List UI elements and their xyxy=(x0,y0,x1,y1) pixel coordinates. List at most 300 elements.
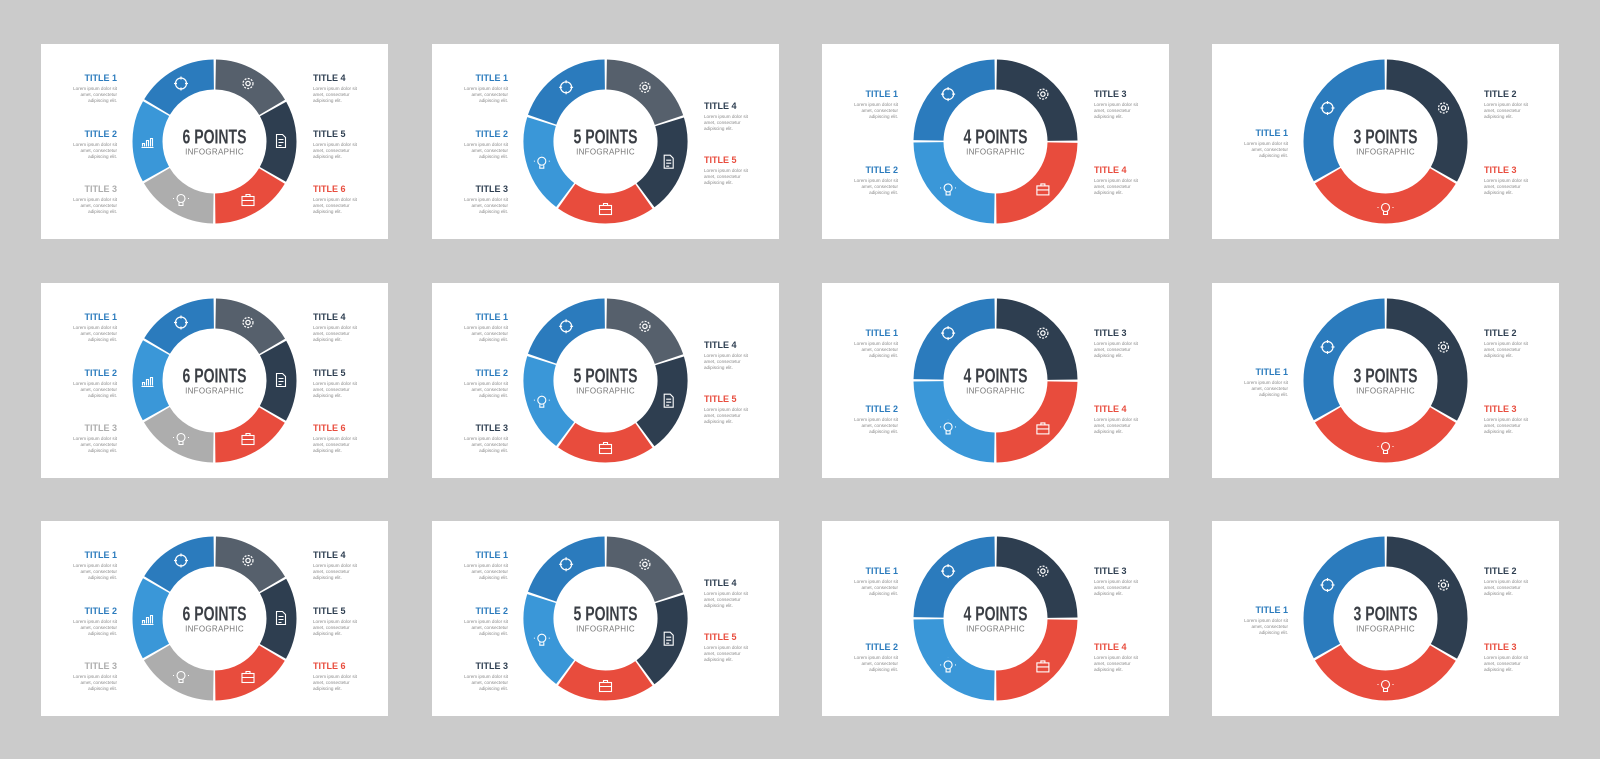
text: title 4 xyxy=(313,312,358,342)
text: title 4 xyxy=(1094,165,1139,195)
text: title 1: TITLE 1 xyxy=(475,550,508,560)
ring: 5 segments: INFOGRAPHIC xyxy=(576,624,635,634)
ring: 4 segments: 4 POINTS xyxy=(964,604,1028,626)
text: title 4 xyxy=(704,578,749,608)
text: title 5 xyxy=(313,129,358,159)
text: title 2: Lorem ipsum dolor sit xyxy=(73,619,118,624)
text: title 5 xyxy=(704,632,749,662)
text: title 2: Lorem ipsum dolor sit xyxy=(854,417,899,422)
text: title 6: Lorem ipsum dolor sit xyxy=(313,197,358,202)
text: title 4: Lorem ipsum dolor sit xyxy=(313,325,358,330)
text: title 3: adipiscing elit. xyxy=(1094,353,1123,358)
text: title 2: adipiscing elit. xyxy=(479,393,508,398)
text: title 2: adipiscing elit. xyxy=(88,154,117,159)
text: title 3: Lorem ipsum dolor sit xyxy=(73,197,118,202)
text: title 2: Lorem ipsum dolor sit xyxy=(1484,102,1529,107)
ring: 5 segments xyxy=(512,48,699,235)
text: title 6: Lorem ipsum dolor sit xyxy=(313,674,358,679)
text: title 3 xyxy=(1484,404,1529,434)
text: title 1: Lorem ipsum dolor sit xyxy=(73,325,118,330)
text: title 4: TITLE 4 xyxy=(704,578,737,588)
text: title 1: Lorem ipsum dolor sit xyxy=(1244,141,1289,146)
text: title 3 xyxy=(1094,566,1139,596)
text: title 3: amet, consectetur xyxy=(80,203,117,208)
text: title 1: TITLE 1 xyxy=(84,312,117,322)
text: title 2: Lorem ipsum dolor sit xyxy=(464,142,509,147)
text: title 4: amet, consectetur xyxy=(704,597,741,602)
text: title 5: TITLE 5 xyxy=(704,632,737,642)
ring: 6 segments xyxy=(123,289,306,472)
text: title 4: amet, consectetur xyxy=(704,120,741,125)
text: title 2: Lorem ipsum dolor sit xyxy=(1484,341,1529,346)
text: title 2: adipiscing elit. xyxy=(88,631,117,636)
text: title 4 xyxy=(704,101,749,131)
card: 5 points arrows xyxy=(432,521,779,716)
text: title 3: amet, consectetur xyxy=(471,203,508,208)
ring: 3 segments: INFOGRAPHIC xyxy=(1356,148,1415,156)
text: title 5: Lorem ipsum dolor sit xyxy=(313,142,358,147)
text: title 3 xyxy=(1094,328,1139,358)
text: title 4: Lorem ipsum dolor sit xyxy=(313,86,358,91)
text: title 2: amet, consectetur xyxy=(1484,108,1521,113)
text: title 1: amet, consectetur xyxy=(471,569,508,574)
text: title 1: amet, consectetur xyxy=(80,92,117,97)
ring: 3 segments: 3 POINTS xyxy=(1354,366,1418,388)
ring: 5 segments xyxy=(512,525,699,712)
text: title 6 xyxy=(313,423,358,453)
text: title 1: amet, consectetur xyxy=(471,92,508,97)
text: title 1: TITLE 1 xyxy=(865,328,898,338)
text: title 1: Lorem ipsum dolor sit xyxy=(464,86,509,91)
text: title 4: adipiscing elit. xyxy=(313,337,342,342)
text: title 1 xyxy=(854,89,899,119)
card: 3 points arrows xyxy=(1212,521,1559,716)
text: title 3: TITLE 3 xyxy=(475,423,508,433)
ring: 6 segments: 6 POINTS xyxy=(182,604,246,626)
text: title 2: amet, consectetur xyxy=(80,387,117,392)
ring: 3 segments xyxy=(1294,289,1477,472)
text: title 1 xyxy=(1244,605,1289,635)
text: title 3: adipiscing elit. xyxy=(479,448,508,453)
text: title 1: adipiscing elit. xyxy=(88,575,117,580)
text: title 6: adipiscing elit. xyxy=(313,448,342,453)
text: title 1: Lorem ipsum dolor sit xyxy=(1244,380,1289,385)
text: title 3: adipiscing elit. xyxy=(88,209,117,214)
text: title 1: TITLE 1 xyxy=(1255,128,1288,138)
text: title 4: Lorem ipsum dolor sit xyxy=(313,563,358,568)
ring: 5 segments: 5 POINTS xyxy=(574,604,638,626)
text: title 5: TITLE 5 xyxy=(704,394,737,404)
text: title 2: adipiscing elit. xyxy=(88,393,117,398)
text: title 1: TITLE 1 xyxy=(84,550,117,560)
text: title 3: adipiscing elit. xyxy=(479,209,508,214)
ring: 6 segments: INFOGRAPHIC xyxy=(185,386,244,396)
ring: 4 segments xyxy=(927,312,1064,449)
text: title 5: adipiscing elit. xyxy=(313,154,342,159)
text: title 1: Lorem ipsum dolor sit xyxy=(854,579,899,584)
text: title 2 xyxy=(464,606,509,636)
text: title 1: Lorem ipsum dolor sit xyxy=(464,563,509,568)
text: title 1: TITLE 1 xyxy=(84,73,117,83)
text: title 5: amet, consectetur xyxy=(704,651,741,656)
text: title 4: TITLE 4 xyxy=(313,312,346,322)
ring: 4 segments: 4 POINTS xyxy=(964,126,1028,148)
text: title 3: TITLE 3 xyxy=(475,184,508,194)
text: title 3: Lorem ipsum dolor sit xyxy=(1094,579,1139,584)
text: title 5 xyxy=(313,368,358,398)
card: 5 points slanted xyxy=(432,283,779,478)
text: title 1: Lorem ipsum dolor sit xyxy=(73,86,118,91)
text: title 3: TITLE 3 xyxy=(84,184,117,194)
text: title 1: amet, consectetur xyxy=(80,331,117,336)
text: title 2 xyxy=(73,129,118,159)
text: title 4: TITLE 4 xyxy=(1094,165,1127,175)
text: title 6: TITLE 6 xyxy=(313,661,346,671)
text: title 3: Lorem ipsum dolor sit xyxy=(1094,102,1139,107)
text: title 1 xyxy=(1244,128,1289,158)
text: title 4: amet, consectetur xyxy=(1094,423,1131,428)
text: title 3: adipiscing elit. xyxy=(88,686,117,691)
text: title 6: amet, consectetur xyxy=(313,442,350,447)
text: title 3: amet, consectetur xyxy=(1484,661,1521,666)
text: title 1 xyxy=(73,312,118,342)
text: title 3: Lorem ipsum dolor sit xyxy=(1484,655,1529,660)
text: title 1: TITLE 1 xyxy=(1255,605,1288,615)
text: title 2: adipiscing elit. xyxy=(869,667,898,672)
text: title 5: amet, consectetur xyxy=(313,387,350,392)
card: 3 points slanted xyxy=(1212,283,1559,478)
text: title 6: TITLE 6 xyxy=(313,184,346,194)
text: title 2: TITLE 2 xyxy=(1484,566,1517,576)
ring: 5 segments: 5 POINTS xyxy=(574,126,638,148)
text: title 6: amet, consectetur xyxy=(313,680,350,685)
text: title 5: TITLE 5 xyxy=(313,129,346,139)
ring: 5 segments: INFOGRAPHIC xyxy=(576,148,635,156)
text: title 6 xyxy=(313,184,358,214)
text: title 2: TITLE 2 xyxy=(84,368,117,378)
text: title 4: TITLE 4 xyxy=(704,340,737,350)
text: title 4: adipiscing elit. xyxy=(313,575,342,580)
text: title 2: TITLE 2 xyxy=(475,606,508,616)
ring: 4 segments xyxy=(927,73,1064,210)
text: title 6: TITLE 6 xyxy=(313,423,346,433)
card: 3 points puzzle xyxy=(1212,44,1559,239)
text: title 5: Lorem ipsum dolor sit xyxy=(313,619,358,624)
text: title 3: Lorem ipsum dolor sit xyxy=(1484,417,1529,422)
text: title 3: adipiscing elit. xyxy=(1094,591,1123,596)
ring: 6 segments xyxy=(123,50,306,233)
text: title 3 xyxy=(1094,89,1139,119)
text: title 2: amet, consectetur xyxy=(80,625,117,630)
text: title 2: adipiscing elit. xyxy=(1484,353,1513,358)
text: title 1: adipiscing elit. xyxy=(479,98,508,103)
text: title 1 xyxy=(73,73,118,103)
text: title 4: TITLE 4 xyxy=(1094,404,1127,414)
card: 6 points arrows xyxy=(41,521,388,716)
text: title 3: amet, consectetur xyxy=(80,442,117,447)
text: title 3: Lorem ipsum dolor sit xyxy=(1484,178,1529,183)
ring: 4 segments: INFOGRAPHIC xyxy=(966,148,1025,156)
text: title 4 xyxy=(313,73,358,103)
text: title 1: adipiscing elit. xyxy=(1259,392,1288,397)
text: title 4 xyxy=(704,340,749,370)
text: title 2: Lorem ipsum dolor sit xyxy=(73,142,118,147)
text: title 2: TITLE 2 xyxy=(475,129,508,139)
text: title 1: adipiscing elit. xyxy=(88,337,117,342)
text: title 2: TITLE 2 xyxy=(475,368,508,378)
text: title 5: amet, consectetur xyxy=(704,174,741,179)
text: title 2: TITLE 2 xyxy=(865,404,898,414)
text: title 3 xyxy=(464,661,509,691)
text: title 3: adipiscing elit. xyxy=(88,448,117,453)
text: title 2: Lorem ipsum dolor sit xyxy=(1484,579,1529,584)
text: title 2 xyxy=(73,606,118,636)
text: title 1: Lorem ipsum dolor sit xyxy=(1244,618,1289,623)
text: title 2: amet, consectetur xyxy=(1484,585,1521,590)
text: title 1: amet, consectetur xyxy=(1251,147,1288,152)
text: title 1: TITLE 1 xyxy=(475,312,508,322)
ring: 3 segments xyxy=(1294,527,1477,710)
text: title 3: amet, consectetur xyxy=(471,680,508,685)
text: title 1: TITLE 1 xyxy=(475,73,508,83)
text: title 2: adipiscing elit. xyxy=(869,429,898,434)
text: title 4: Lorem ipsum dolor sit xyxy=(704,114,749,119)
text: title 1: TITLE 1 xyxy=(865,566,898,576)
text: title 3: amet, consectetur xyxy=(1094,108,1131,113)
text: title 3: Lorem ipsum dolor sit xyxy=(73,674,118,679)
text: title 3: TITLE 3 xyxy=(1094,328,1127,338)
text: title 2 xyxy=(464,368,509,398)
ring: 6 segments: 6 POINTS xyxy=(182,126,246,148)
text: title 3: TITLE 3 xyxy=(475,661,508,671)
text: title 2: adipiscing elit. xyxy=(479,154,508,159)
text: title 1: adipiscing elit. xyxy=(1259,630,1288,635)
ring: 6 segments: 6 POINTS xyxy=(182,366,246,388)
ring: 4 segments xyxy=(927,550,1064,687)
text: title 3: Lorem ipsum dolor sit xyxy=(1094,341,1139,346)
text: title 4: TITLE 4 xyxy=(704,101,737,111)
text: title 2: TITLE 2 xyxy=(1484,328,1517,338)
text: title 5 xyxy=(313,606,358,636)
text: title 1: adipiscing elit. xyxy=(88,98,117,103)
text: title 2: adipiscing elit. xyxy=(1484,114,1513,119)
text: title 3: amet, consectetur xyxy=(1094,347,1131,352)
ring: 4 segments: 4 POINTS xyxy=(964,366,1028,388)
text: title 1: TITLE 1 xyxy=(865,89,898,99)
text: title 3 xyxy=(464,423,509,453)
text: title 1: amet, consectetur xyxy=(471,331,508,336)
text: title 2: adipiscing elit. xyxy=(1484,591,1513,596)
text: title 1 xyxy=(854,566,899,596)
text: title 4: amet, consectetur xyxy=(704,359,741,364)
text: title 3 xyxy=(1484,642,1529,672)
text: title 1: amet, consectetur xyxy=(80,569,117,574)
text: title 4: adipiscing elit. xyxy=(313,98,342,103)
text: title 2 xyxy=(1484,89,1529,119)
text: title 1: Lorem ipsum dolor sit xyxy=(854,341,899,346)
text: title 2: amet, consectetur xyxy=(471,148,508,153)
text: title 3: TITLE 3 xyxy=(1484,642,1517,652)
ring: 5 segments: 5 POINTS xyxy=(574,366,638,388)
text: title 4: amet, consectetur xyxy=(313,331,350,336)
text: title 5: amet, consectetur xyxy=(704,413,741,418)
text: title 5: Lorem ipsum dolor sit xyxy=(704,645,749,650)
text: title 4: TITLE 4 xyxy=(313,73,346,83)
text: title 3 xyxy=(73,661,118,691)
text: title 2: adipiscing elit. xyxy=(479,631,508,636)
text: title 3: TITLE 3 xyxy=(1094,89,1127,99)
ring: 6 segments: INFOGRAPHIC xyxy=(185,148,244,156)
text: title 1: adipiscing elit. xyxy=(869,114,898,119)
text: title 5: adipiscing elit. xyxy=(313,631,342,636)
text: title 1: amet, consectetur xyxy=(861,347,898,352)
text: title 4: Lorem ipsum dolor sit xyxy=(704,353,749,358)
text: title 3: adipiscing elit. xyxy=(479,686,508,691)
text: title 1: adipiscing elit. xyxy=(1259,153,1288,158)
text: title 2: TITLE 2 xyxy=(865,165,898,175)
text: title 2: TITLE 2 xyxy=(84,129,117,139)
text: title 2: Lorem ipsum dolor sit xyxy=(854,655,899,660)
text: title 4: TITLE 4 xyxy=(313,550,346,560)
text: title 1 xyxy=(854,328,899,358)
text: title 4: amet, consectetur xyxy=(1094,184,1131,189)
text: title 4: adipiscing elit. xyxy=(1094,667,1123,672)
text: title 5: amet, consectetur xyxy=(313,148,350,153)
text: title 4: amet, consectetur xyxy=(313,569,350,574)
text: title 4: adipiscing elit. xyxy=(704,365,733,370)
text: title 3 xyxy=(73,184,118,214)
text: title 3: TITLE 3 xyxy=(1484,404,1517,414)
text: title 1: adipiscing elit. xyxy=(869,591,898,596)
text: title 1 xyxy=(464,550,509,580)
text: title 1: adipiscing elit. xyxy=(479,337,508,342)
text: title 5: Lorem ipsum dolor sit xyxy=(313,381,358,386)
text: title 5: TITLE 5 xyxy=(704,155,737,165)
text: title 4: TITLE 4 xyxy=(1094,642,1127,652)
card: 6 points slanted xyxy=(41,283,388,478)
text: title 3: TITLE 3 xyxy=(84,661,117,671)
text: title 3: adipiscing elit. xyxy=(1484,429,1513,434)
text: title 6 xyxy=(313,661,358,691)
text: title 3: Lorem ipsum dolor sit xyxy=(464,674,509,679)
text: title 3: amet, consectetur xyxy=(471,442,508,447)
text: title 3 xyxy=(1484,165,1529,195)
text: title 4 xyxy=(313,550,358,580)
text: title 5: adipiscing elit. xyxy=(704,180,733,185)
text: title 2 xyxy=(464,129,509,159)
text: title 5: Lorem ipsum dolor sit xyxy=(704,168,749,173)
text: title 3: TITLE 3 xyxy=(84,423,117,433)
card: 4 points slanted xyxy=(822,283,1169,478)
text: title 4: Lorem ipsum dolor sit xyxy=(1094,655,1139,660)
text: title 3: Lorem ipsum dolor sit xyxy=(464,436,509,441)
text: title 5: adipiscing elit. xyxy=(313,393,342,398)
text: title 2: amet, consectetur xyxy=(471,387,508,392)
text: title 1 xyxy=(464,73,509,103)
text: title 2: Lorem ipsum dolor sit xyxy=(73,381,118,386)
text: title 2: amet, consectetur xyxy=(861,184,898,189)
ring: 3 segments: 3 POINTS xyxy=(1354,604,1418,626)
ring: 5 segments: INFOGRAPHIC xyxy=(576,386,635,396)
text: title 4 xyxy=(1094,642,1139,672)
text: title 4: adipiscing elit. xyxy=(704,603,733,608)
ring: 6 segments: INFOGRAPHIC xyxy=(185,624,244,634)
text: title 2: amet, consectetur xyxy=(861,423,898,428)
text: title 2 xyxy=(854,165,899,195)
text: title 3: Lorem ipsum dolor sit xyxy=(73,436,118,441)
text: title 2 xyxy=(854,404,899,434)
text: title 6: adipiscing elit. xyxy=(313,209,342,214)
ring: 3 segments xyxy=(1294,50,1477,233)
text: title 2 xyxy=(73,368,118,398)
card: 5 points puzzle xyxy=(432,44,779,239)
text: title 3: adipiscing elit. xyxy=(1484,190,1513,195)
text: title 2: TITLE 2 xyxy=(865,642,898,652)
text: title 5: TITLE 5 xyxy=(313,368,346,378)
text: title 3: amet, consectetur xyxy=(1094,585,1131,590)
ring: 5 segments xyxy=(512,287,699,474)
ring: 4 segments: INFOGRAPHIC xyxy=(966,624,1025,634)
text: title 4: adipiscing elit. xyxy=(1094,429,1123,434)
text: title 1 xyxy=(1244,367,1289,397)
text: title 2: amet, consectetur xyxy=(861,661,898,666)
text: title 3: TITLE 3 xyxy=(1484,165,1517,175)
text: title 2: TITLE 2 xyxy=(84,606,117,616)
ring: 4 segments: INFOGRAPHIC xyxy=(966,386,1025,396)
text: title 1: TITLE 1 xyxy=(1255,367,1288,377)
text: title 4: amet, consectetur xyxy=(313,92,350,97)
text: title 2: Lorem ipsum dolor sit xyxy=(464,381,509,386)
text: title 1: adipiscing elit. xyxy=(869,353,898,358)
text: title 4: adipiscing elit. xyxy=(704,126,733,131)
text: title 5: adipiscing elit. xyxy=(704,419,733,424)
text: title 2 xyxy=(1484,566,1529,596)
text: title 1: amet, consectetur xyxy=(861,585,898,590)
text: title 1: amet, consectetur xyxy=(861,108,898,113)
card: 4 points puzzle xyxy=(822,44,1169,239)
text: title 5: TITLE 5 xyxy=(313,606,346,616)
text: title 1: Lorem ipsum dolor sit xyxy=(464,325,509,330)
text: title 5: Lorem ipsum dolor sit xyxy=(704,407,749,412)
ring: 6 segments xyxy=(123,527,306,710)
text: title 2: amet, consectetur xyxy=(1484,347,1521,352)
text: title 5 xyxy=(704,155,749,185)
text: title 6: amet, consectetur xyxy=(313,203,350,208)
text: title 1: Lorem ipsum dolor sit xyxy=(854,102,899,107)
text: title 2: TITLE 2 xyxy=(1484,89,1517,99)
text: title 4: adipiscing elit. xyxy=(1094,190,1123,195)
text: title 6: adipiscing elit. xyxy=(313,686,342,691)
text: title 4 xyxy=(1094,404,1139,434)
text: title 3 xyxy=(464,184,509,214)
text: title 2: adipiscing elit. xyxy=(869,190,898,195)
text: title 2 xyxy=(1484,328,1529,358)
text: title 2: Lorem ipsum dolor sit xyxy=(464,619,509,624)
text: title 2 xyxy=(854,642,899,672)
card: 6 points puzzle xyxy=(41,44,388,239)
text: title 3: adipiscing elit. xyxy=(1094,114,1123,119)
text: title 2: Lorem ipsum dolor sit xyxy=(854,178,899,183)
text: title 1: Lorem ipsum dolor sit xyxy=(73,563,118,568)
text: title 3: Lorem ipsum dolor sit xyxy=(464,197,509,202)
text: title 3: TITLE 3 xyxy=(1094,566,1127,576)
text: title 3: amet, consectetur xyxy=(80,680,117,685)
text: title 4: amet, consectetur xyxy=(1094,661,1131,666)
text: title 3: adipiscing elit. xyxy=(1484,667,1513,672)
text: title 6: Lorem ipsum dolor sit xyxy=(313,436,358,441)
text: title 2: amet, consectetur xyxy=(80,148,117,153)
text: title 1 xyxy=(464,312,509,342)
